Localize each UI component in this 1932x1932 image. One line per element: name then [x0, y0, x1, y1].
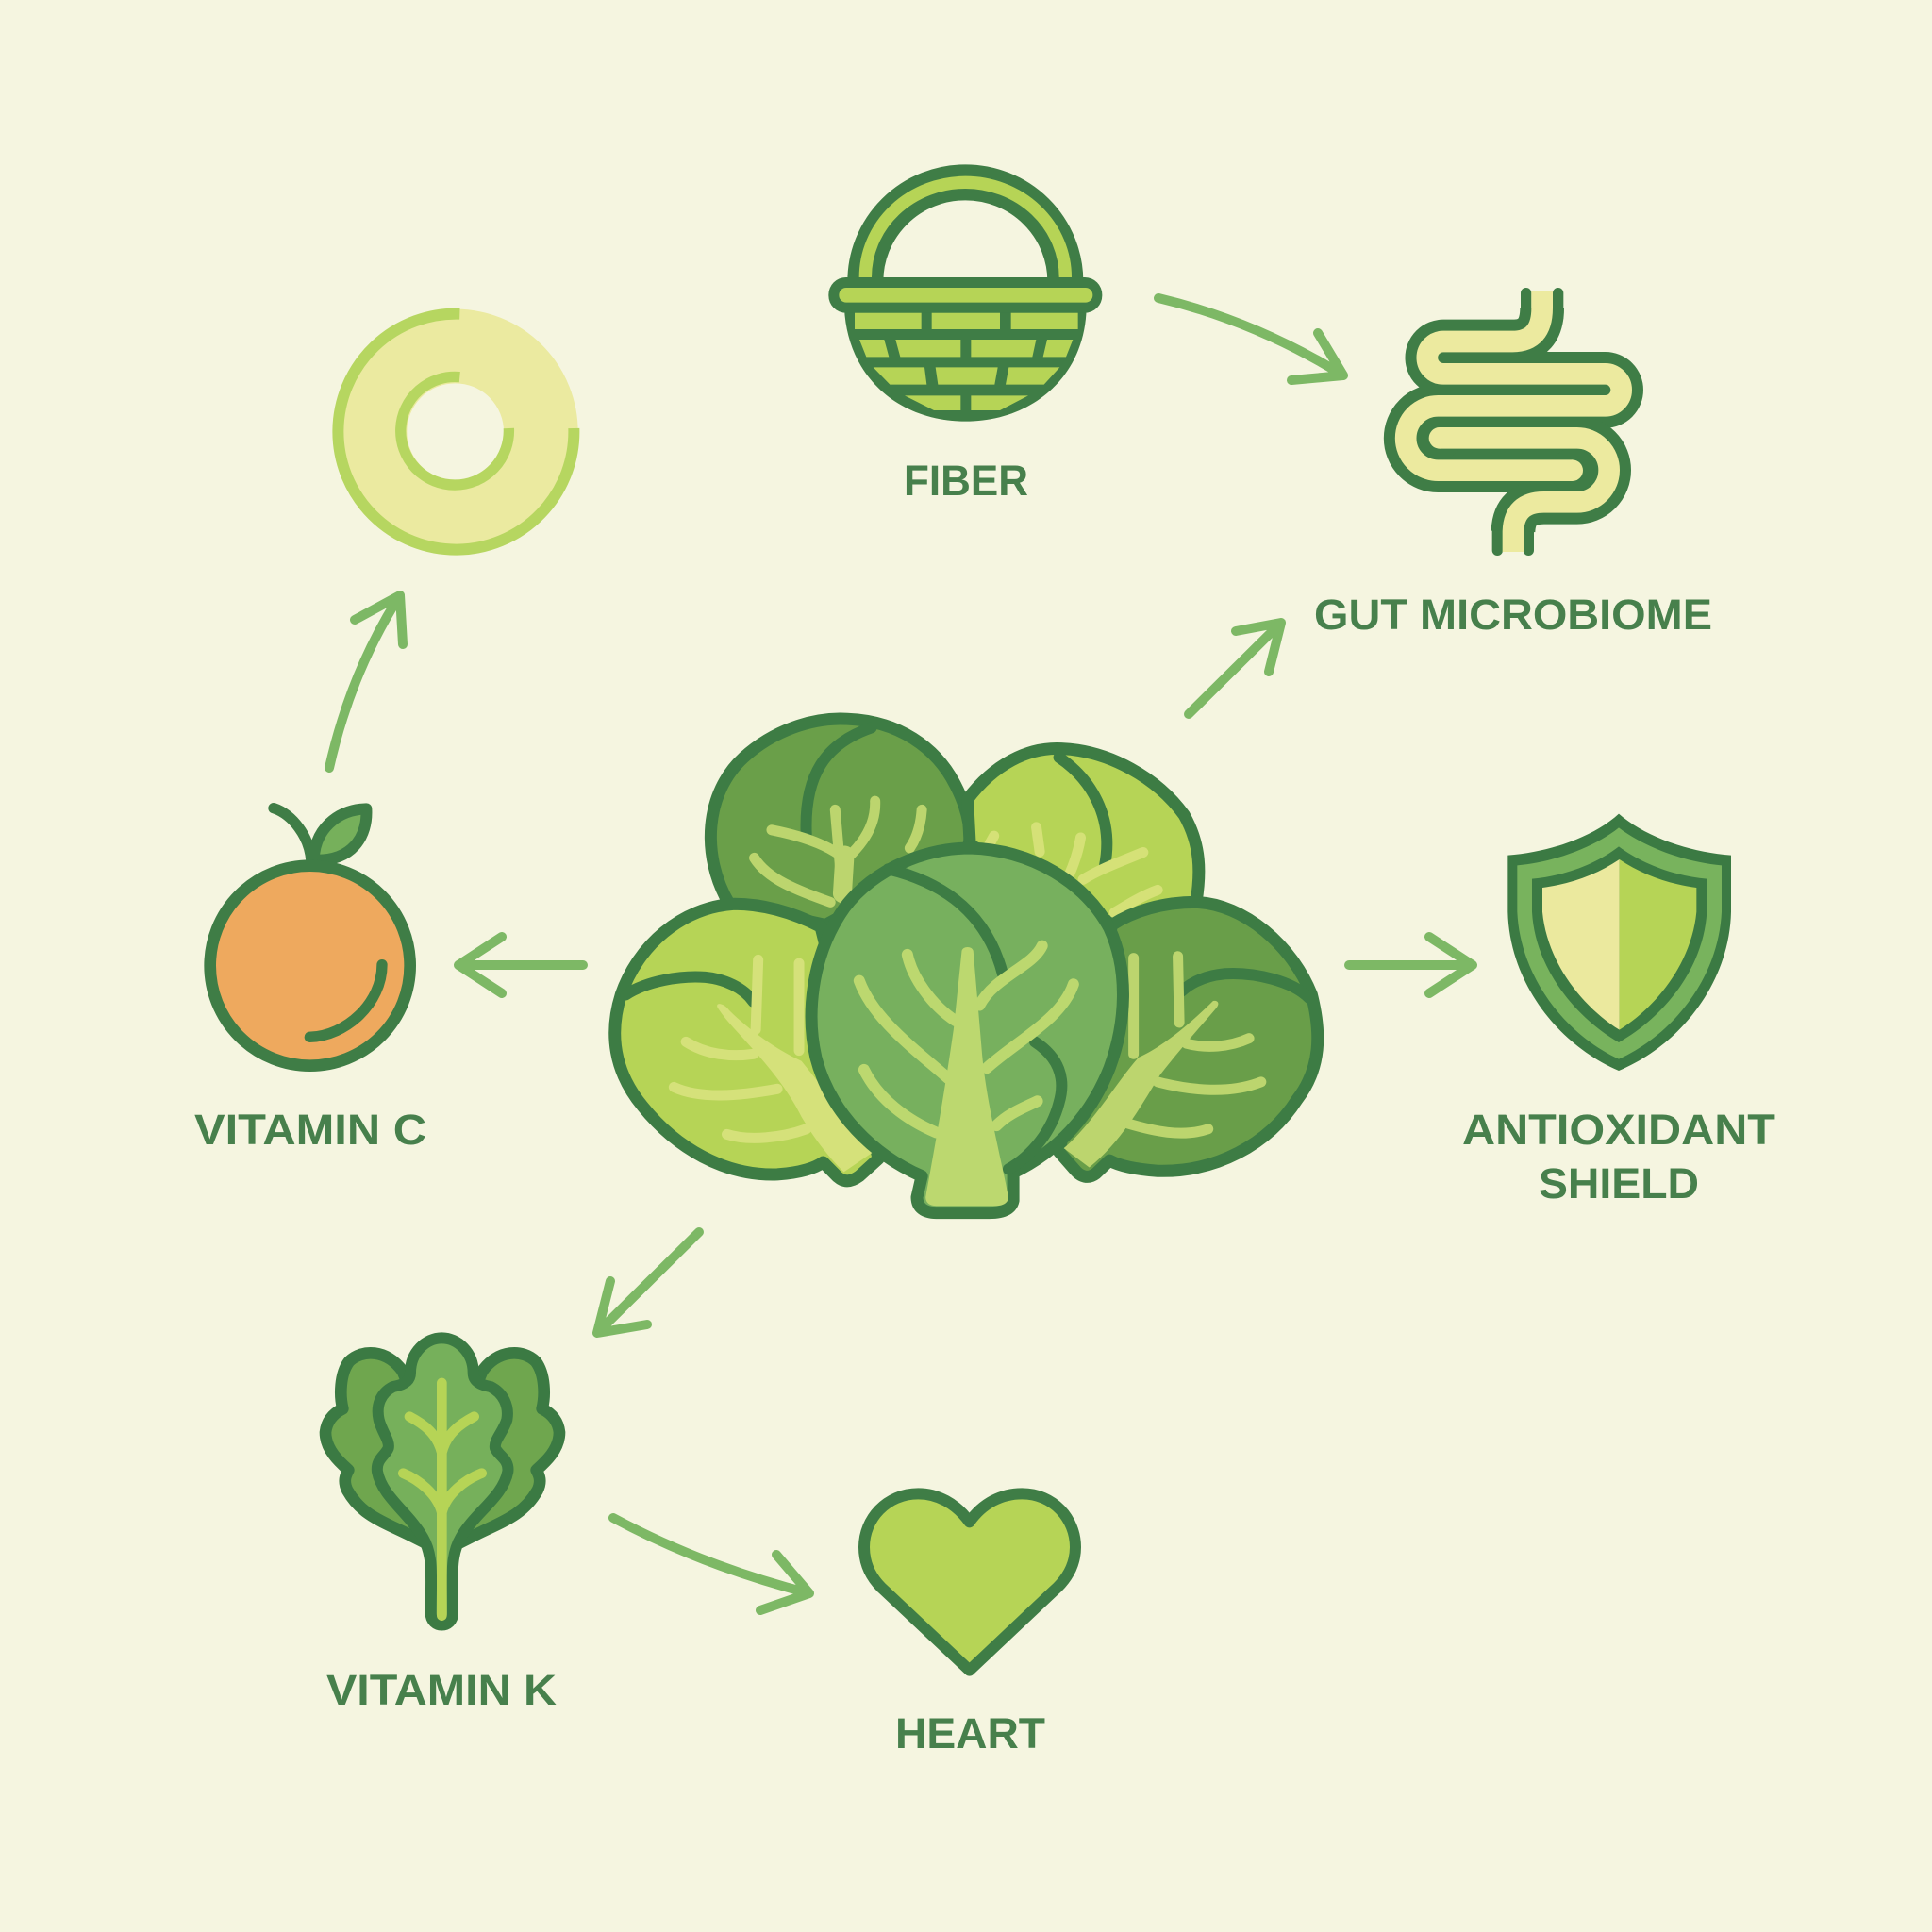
front-right leaf: [1059, 902, 1318, 1176]
front-left leaf: [615, 904, 878, 1181]
label: shield: SHIELD: [1539, 1159, 1699, 1208]
icon: donut ring: [338, 314, 574, 550]
label: antioxidant: ANTIOXIDANT: [1462, 1106, 1775, 1154]
arrow: sprouts to antioxidant shield: [1349, 937, 1473, 993]
icon: orange: [210, 808, 410, 1066]
arrow: fiber to gut microbiome: [1158, 298, 1343, 380]
front lobe: [377, 1338, 508, 1624]
arrow: sprouts to vitamin K: [597, 1232, 699, 1333]
basket bowl: [844, 308, 1087, 422]
front centre leaf: [811, 848, 1123, 1213]
right back lobe: [448, 1353, 559, 1544]
arrow: vitamin C to ring: [329, 595, 403, 768]
label: vitamin C: VITAMIN C: [194, 1106, 426, 1154]
label: heart: HEART: [895, 1709, 1045, 1757]
arrow: vitamin K to heart: [613, 1518, 809, 1610]
icon: vitamin K leaf: [325, 1338, 559, 1624]
left back lobe: [325, 1353, 437, 1544]
icon: gut microbiome intestine: [1406, 291, 1622, 552]
icon: heart: [864, 1493, 1075, 1671]
arrow: sprouts to gut microbiome: [1189, 623, 1281, 714]
icon: antioxidant shield: [1507, 814, 1731, 1071]
arrow: sprouts to vitamin C: [458, 937, 583, 993]
icon: brussels sprouts cluster: [615, 719, 1318, 1213]
basket rim: [828, 277, 1102, 313]
label: vitamin K: VITAMIN K: [326, 1666, 558, 1714]
icon: fiber basket: [828, 182, 1102, 422]
back-left leaf: [710, 719, 970, 924]
intestine channel: [1406, 291, 1622, 552]
label: gut microbiome: GUT MICROBIOME: [1314, 591, 1712, 639]
basket handle: [865, 182, 1065, 281]
leaf veins: [403, 1383, 482, 1616]
intestine walls: [1406, 293, 1622, 550]
label: fiber: FIBER: [904, 457, 1028, 505]
back-right leaf: [968, 749, 1199, 924]
